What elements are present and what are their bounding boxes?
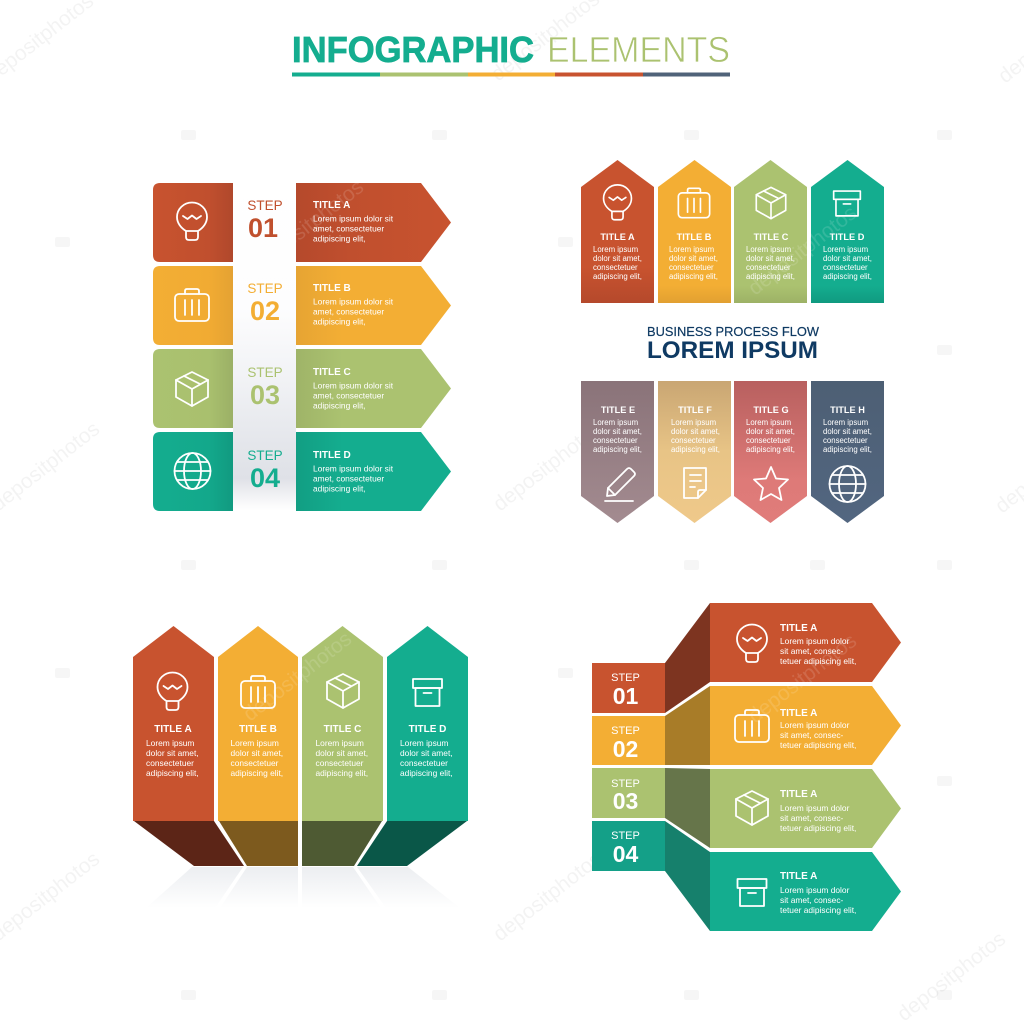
column title c: adipiscing elit, [316,768,368,778]
step 03 fold arrow: tetuer adipiscing elit, [780,823,856,833]
column title b: TITLE B [677,232,712,242]
column title c: TITLE C [754,232,789,242]
column title d [357,626,468,866]
column title c: dolor sit amet, [746,254,795,263]
step 1 row: amet, consectetuer [313,224,384,234]
column title c: TITLE C [324,724,361,735]
column title g: Lorem ipsum [746,418,791,427]
background watermark: depositphotos [489,417,606,516]
panel: folded step arrows [592,603,901,931]
column title d: TITLE D [409,724,446,735]
step 03 fold arrow [592,768,901,848]
overlay watermark [239,175,861,728]
step 4 row: amet, consectetuer [313,474,384,484]
step 2 row: TITLE B [313,283,351,294]
overlay watermark: depositphotos [744,629,861,728]
step 4 row: TITLE D [313,450,351,461]
column title f: dolor sit amet, [671,427,720,436]
step 04 fold arrow: 04 [613,841,638,867]
column title b: adipiscing elit, [230,768,283,778]
column title a: consectetuer [593,263,638,272]
step 2 row: amet, consectetuer [313,306,384,316]
column title h: consectetuer [823,436,868,445]
step 01 fold arrow: TITLE A [780,623,817,634]
column title a: dolor sit amet, [593,254,642,263]
center heading [647,325,819,364]
column title g: TITLE G [753,405,789,415]
step 04 fold arrow: sit amet, consec- [780,895,844,905]
column title e: consectetuer [593,436,638,445]
column title b [658,160,731,303]
column title c: adipiscing elit, [746,272,795,281]
column title h: Lorem ipsum [823,418,868,427]
step 4 row: Lorem ipsum dolor sit [313,464,394,474]
column title d: adipiscing elit, [400,768,453,778]
title text: infographic: INFOGRAPHIC [292,29,534,70]
step 04 fold arrow: TITLE A [780,871,817,882]
column title d: Lorem ipsum [823,245,868,254]
title [292,29,730,76]
step 1 row: Lorem ipsum dolor sit [313,214,394,224]
column title f: consectetuer [671,436,716,445]
column title h [811,381,884,523]
column title e: TITLE E [601,405,635,415]
column title b: consectetuer [230,758,279,768]
step 3 row [153,349,451,428]
column title b: dolor sit amet, [669,254,718,263]
column title b: Lorem ipsum [669,245,714,254]
title rule [292,72,730,76]
column title c: consectetuer [746,263,791,272]
column title h: TITLE H [830,405,865,415]
column title b: consectetuer [669,263,714,272]
column title e: Lorem ipsum [593,418,638,427]
step 01 fold arrow: Lorem ipsum dolor [780,636,850,646]
column title g: consectetuer [746,436,791,445]
step 03 fold arrow: 03 [613,788,638,814]
step 03 fold arrow: sit amet, consec- [780,813,844,823]
step 4 row [153,432,451,511]
step 04 fold arrow: tetuer adipiscing elit, [780,905,856,915]
column title b: Lorem ipsum [230,738,279,748]
column title a: Lorem ipsum [146,738,194,748]
step 03 fold arrow: Lorem ipsum dolor [780,803,850,813]
step 2 row [153,266,451,345]
column title b: TITLE B [239,724,277,735]
step 2 row: adipiscing elit, [313,316,366,326]
column title a [581,160,654,303]
column title b: dolor sit amet, [230,748,283,758]
column title c: Lorem ipsum [746,245,791,254]
step 04 fold arrow: Lorem ipsum dolor [780,885,850,895]
step 02 fold arrow: Lorem ipsum dolor [780,720,850,730]
column title c [302,626,383,866]
step 01 fold arrow: 01 [613,683,638,709]
step 3 row: STEP [247,365,283,380]
step 02 fold arrow: sit amet, consec- [780,730,844,740]
column title d: dolor sit amet, [400,748,453,758]
step 01 fold arrow [592,603,901,713]
column title f: TITLE F [678,405,712,415]
column title d: consectetuer [823,263,868,272]
column title f [658,381,731,523]
step 02 fold arrow: TITLE A [780,708,817,719]
column title b [218,626,298,866]
column title a [133,626,244,866]
step 1 row: adipiscing elit, [313,234,366,244]
column title f: Lorem ipsum [671,418,716,427]
step 01 fold arrow: tetuer adipiscing elit, [780,656,856,666]
step 4 row: adipiscing elit, [313,484,366,494]
column title h: adipiscing elit, [823,445,872,454]
column title c: consectetuer [316,758,364,768]
step 3 row: adipiscing elit, [313,400,366,410]
step 1 row [153,183,451,262]
step 2 row: STEP [247,281,283,296]
center heading: BUSINESS PROCESS FLOW [647,325,819,339]
step 2 row: 02 [250,296,280,326]
step 04 fold arrow [592,821,901,931]
column title d: dolor sit amet, [823,254,872,263]
overlay watermark: depositphotos [251,175,368,274]
column title a: adipiscing elit, [593,272,642,281]
overlay watermark: depositphotos [744,201,861,300]
column title e [581,381,654,523]
column title d [811,160,884,303]
step 2 row: Lorem ipsum dolor sit [313,296,394,306]
column title g: adipiscing elit, [746,445,795,454]
column title c: Lorem ipsum [316,738,364,748]
step 03 fold arrow: STEP [611,778,640,790]
column title a: consectetuer [146,758,194,768]
step 01 fold arrow: STEP [611,672,640,684]
column title h: dolor sit amet, [823,427,872,436]
panel: 3d columns [133,626,468,908]
floor reflection [146,867,460,908]
column title g [734,381,807,523]
center heading: LOREM IPSUM [647,337,818,364]
step 04 fold arrow: STEP [611,830,640,842]
title text: elements: ELEMENTS [547,29,730,70]
step 4 row: 04 [250,463,280,493]
step 02 fold arrow: 02 [613,736,638,762]
background watermark: depositphotos [489,847,606,946]
column title a: dolor sit amet, [146,748,199,758]
column title c: dolor sit amet, [316,748,368,758]
step 1 row: 01 [248,213,278,243]
step 4 row: STEP [247,448,283,463]
step 02 fold arrow [592,686,901,765]
column title d: Lorem ipsum [400,738,448,748]
column title a: adipiscing elit, [146,768,199,778]
column title f: adipiscing elit, [671,445,720,454]
column title e: adipiscing elit, [593,445,642,454]
step 3 row: TITLE C [313,367,351,378]
column title a: TITLE A [154,724,192,735]
step 1 row: TITLE A [313,200,350,211]
column title b: adipiscing elit, [669,272,718,281]
column title e: dolor sit amet, [593,427,642,436]
panel: four step list with square icons [153,183,451,511]
column title d: TITLE D [830,232,865,242]
panel: upward and downward column arrows [581,160,884,523]
column title d: adipiscing elit, [823,272,872,281]
center shadow strip [233,183,296,511]
background watermark: depositphotos [893,927,1010,1024]
step 3 row: 03 [250,380,280,410]
column title c [734,160,807,303]
column title a: TITLE A [600,232,635,242]
step 3 row: amet, consectetuer [313,390,384,400]
column title a: Lorem ipsum [593,245,638,254]
overlay watermark: depositphotos [239,627,356,726]
step 3 row: Lorem ipsum dolor sit [313,380,394,390]
step 02 fold arrow: STEP [611,725,640,737]
step 01 fold arrow: sit amet, consec- [780,646,844,656]
column title d: consectetuer [400,758,448,768]
step 02 fold arrow: tetuer adipiscing elit, [780,740,856,750]
step 03 fold arrow: TITLE A [780,789,817,800]
step 1 row: STEP [247,198,283,213]
column title g: dolor sit amet, [746,427,795,436]
